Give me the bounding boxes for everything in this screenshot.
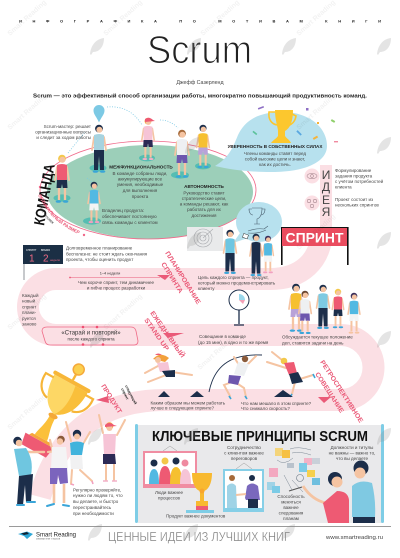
text: product over documents: Продукт важнее документов (166, 514, 226, 518)
footer slogan: ЦЕННЫЕ ИДЕИ ИЗ ЛУЧШИХ КНИГ (108, 529, 290, 544)
watermark: Smart Reading (7, 293, 48, 331)
title: Scrum (147, 29, 252, 72)
label: next sprint: спринт (120, 388, 130, 401)
text: inspect regularly: вы делаете, и быстро (73, 499, 119, 504)
text: sprint goal: который можно продемонстрировать (198, 280, 276, 286)
text: product owner: обеспечивает постоянную (102, 214, 157, 219)
text: people over processes: процессов (158, 496, 181, 500)
logo: smart reading (18, 532, 76, 540)
text: confidence: как их достичь. (259, 162, 291, 167)
panel: target (187, 227, 223, 251)
text: autonomy: достижения (192, 213, 217, 218)
label: sprint board: СПРИНТ (26, 249, 37, 252)
label: sprint board: 1 (29, 254, 35, 264)
text: each new sprint: руется (22, 316, 36, 321)
text: inspect regularly: перестраивайтесь (73, 504, 112, 510)
subtitle: Scrum — это эффективный способ организации работы, многократно повышающий продуктивность команд. (33, 92, 368, 100)
person: man lifting trophy (13, 437, 44, 505)
label: duration: 1–4 недели (100, 270, 120, 276)
person: product owner (88, 182, 100, 223)
text: autonomy: АВТОНОМНОСТЬ (184, 184, 225, 189)
arrow: duration (69, 275, 170, 280)
text: autonomy: Руководство ставит (183, 190, 225, 196)
text: stand up meeting: (до 15 мин), в одно и то же время (198, 340, 269, 345)
heading: key principles: КЛЮЧЕВЫЕ ПРИНЦИПЫ SCRUM (152, 428, 368, 445)
text: cross-functional: умения, необходимые (117, 182, 164, 187)
text: 5-9 человек (40, 207, 54, 224)
text: long-term planning: бесполезно: не стоит ждать окончания (66, 252, 148, 256)
heading: daily stand up (142, 309, 187, 359)
heading: retrospective: РЕТРОСПЕКТИВНОЕ (318, 359, 364, 425)
text: sprint goal: Цель каждого спринта — продукт, (198, 275, 269, 280)
person: runner (145, 354, 192, 382)
marker: triangle right (318, 397, 331, 403)
icon: clock (229, 290, 249, 325)
text: scrum master: и следит за ходом работы (36, 135, 91, 140)
person: red shirt man (303, 472, 349, 523)
callout: wash and repeat: после каждого спринта (67, 336, 115, 342)
text: collaboration: переговоров (231, 456, 258, 461)
text: autonomy: работать для их (187, 207, 222, 212)
heading: sprint planning: СПРИНТА (159, 261, 184, 295)
person: product team cap (142, 118, 155, 160)
icon: map pin (94, 105, 104, 122)
road: sprint path (28, 165, 374, 497)
heading: daily stand up: STAND UP (142, 317, 170, 353)
confetti (252, 106, 338, 142)
text: confidence: УВЕРЕННОСТЬ В СОБСТВЕННЫХ СИЛАХ (228, 144, 323, 149)
icon: small trophy (186, 473, 214, 513)
text: each new sprint: спринт (22, 304, 36, 310)
text: people over processes: Люди важнее (155, 490, 183, 495)
person: girl blue shirt (66, 422, 93, 485)
text: current status: Обсуждается текущее положение (282, 334, 353, 340)
panel: team ellipse (39, 141, 256, 239)
bubble: sprint goal (233, 202, 282, 243)
text: sprint goal: клиенту (198, 286, 215, 291)
vertical heading: idea: Я (322, 205, 330, 219)
text: titles: что вы делаете (336, 456, 368, 461)
watermark: Smart Reading (103, 0, 144, 37)
text: cross-functional: проекта (132, 194, 149, 199)
header kicker: И Н Ф О Г Р А Ф И К А П О М О Т И В А М К Н И Г И (19, 18, 381, 24)
picture: team (143, 446, 197, 488)
callout: wash and repeat (42, 326, 138, 346)
section: idea (304, 168, 384, 219)
text: idea notes: клиента (335, 184, 352, 190)
author: Джефф Сазерленд (176, 80, 224, 86)
text: stand up meeting: Совещание в команде (199, 334, 246, 339)
label: team size (40, 208, 60, 229)
text: idea notes: Формулирование (335, 168, 372, 173)
text: idea notes: с учётом потребностей (335, 178, 384, 184)
markers: mounds (158, 390, 293, 397)
vertical heading: idea: Е (322, 193, 330, 207)
label: sprint board (23, 245, 63, 280)
text: cross-functional: для выполнения (123, 188, 158, 193)
text: responding to change: важнее (283, 505, 299, 510)
text: autonomy: стратегические цели, (182, 196, 226, 201)
text: current status: дел, ставятся задачи на день (282, 340, 344, 346)
text: long-term planning: проекта, чтобы оценить продукт (66, 257, 133, 262)
text: each new sprint: новый (22, 298, 36, 304)
person: blue shirt man (352, 460, 375, 523)
person: yellow shirt (197, 125, 209, 168)
text: retrospective left: лучше в следующем спринте? (150, 406, 214, 410)
text: cross-functional: МЕЖФУНКЦИОНАЛЬНОСТЬ (109, 164, 173, 170)
icon: sticky notes board (267, 448, 320, 493)
vertical heading: idea: И (322, 168, 330, 182)
text: idea notes: задания продукта (335, 174, 373, 178)
heading: product: ПРОДУКТ (99, 383, 123, 415)
text: inspect regularly: при необходимости (73, 511, 114, 516)
text: product owner: связь команды с клиентом (102, 220, 158, 225)
callout: wash and repeat: «Старай и повторяй» (61, 330, 121, 336)
marker: product triangle (96, 396, 109, 403)
vertical heading: idea: Д (322, 180, 330, 194)
logo: smart reading: Smart Reading (36, 532, 76, 538)
text: collaboration: с клиентом важнее (224, 450, 264, 456)
text: autonomy: а команды решают, как (180, 202, 228, 206)
banner: sprint (281, 227, 349, 265)
heading: sprint planning: ПЛАНИРОВАНИЕ (163, 250, 202, 306)
person: red shirt (55, 155, 69, 203)
label: sprint board: 2 (43, 254, 49, 264)
text: responding to change: Способность (277, 494, 305, 499)
panel: key principles (135, 424, 384, 523)
icon: idea step 2 (304, 196, 320, 210)
text: each new sprint: заново (22, 322, 37, 326)
watermark: Smart Reading (103, 293, 144, 331)
person: jumper (267, 352, 315, 397)
picture: handshake (223, 463, 264, 512)
text: confidence: Члены команды ставят перед (244, 151, 306, 156)
watermark: Smart Reading (7, 393, 48, 431)
text: retrospective right: Что снижало скорость? (241, 406, 290, 411)
heading: retrospective: СОВЕЩАНИЕ (313, 371, 345, 415)
text: scrum master: Scrum-мастер: решает (44, 124, 91, 129)
marker: triangle (163, 333, 184, 338)
icon: gold trophy (269, 110, 296, 143)
text: each new sprint: Каждый (22, 292, 39, 298)
text: collaboration: Сотрудничество (227, 445, 261, 450)
text: shorter sprint: и гибче процесс разработки (87, 286, 146, 290)
text: titles: Должности и титулы (331, 445, 373, 450)
text: inspect regularly: нужно ли людям то, что (73, 493, 123, 498)
text: inspect regularly: Регулярно проверяйте, (73, 486, 121, 492)
dotted links (68, 107, 178, 184)
text: product owner: Владелец продукта: (102, 208, 144, 213)
text: long-term planning: Долговременное планирование (66, 246, 133, 250)
watermark: Smart Reading (7, 93, 48, 131)
text: responding to change: планам (283, 516, 299, 521)
watermark: Smart Reading (296, 213, 337, 251)
watermark: Smart Reading (296, 93, 337, 131)
label: next sprint: следующий (124, 385, 138, 405)
people: team shadows (54, 155, 211, 225)
text: each new sprint: плани- (22, 310, 37, 315)
text: ОПТИМАЛЬНЫЙ РАЗМЕР (38, 194, 80, 234)
divider (9, 526, 391, 527)
text: idea notes: нескольких спринтов (335, 202, 379, 208)
watermark: Smart Reading (200, 0, 241, 37)
person: girl cap (99, 415, 125, 481)
people: stand up group (289, 284, 360, 334)
text: retrospective right: Что нам мешало в этом спринте? (241, 401, 312, 406)
icon: idea step 1 (304, 168, 320, 184)
text: cross-functional: В команде собраны люди, (113, 171, 167, 176)
label: sprint board: недели (50, 258, 60, 262)
heading: team: КОМАНДА (31, 163, 59, 227)
text: cross-functional: аккумулирующие все (118, 176, 163, 182)
watermark: Smart Reading (197, 333, 238, 371)
logo: smart reading: саммари книг и курсов (36, 538, 61, 540)
watermark: Smart Reading (7, 0, 48, 37)
person: pole vaulter (209, 355, 262, 399)
heading: daily stand up: ЕЖЕДНЕВНЫЙ (148, 309, 187, 359)
text: idea notes: Проект состоит из (335, 197, 373, 202)
footer url: www.smartreading.ru (325, 535, 383, 541)
banner: sprint: СПРИНТ (286, 230, 344, 246)
bubble: confidence (215, 106, 338, 172)
people: sprint planning (224, 230, 273, 276)
label: optimal size (38, 195, 84, 236)
person: white shirt (175, 130, 189, 178)
watermark: Smart Reading (296, 0, 337, 37)
label: sprint board: ВРЕМЯ (41, 249, 50, 252)
text: shorter sprint: Чем короче спринт, тем динамичнее (78, 280, 155, 285)
text: confidence: собой высокие цели и знают, (245, 156, 305, 162)
text: responding to change: меняться (281, 500, 301, 504)
person: man white shirt (47, 436, 69, 506)
person: scrum master (92, 125, 106, 173)
text: responding to change: следования (279, 510, 304, 516)
text: retrospective left: Каким образом мы можем работать (150, 400, 226, 406)
icon: big trophy (10, 352, 105, 464)
text: titles: не важны — важно то, (329, 450, 375, 456)
text: scrum master: организационные вопросы (35, 130, 91, 134)
